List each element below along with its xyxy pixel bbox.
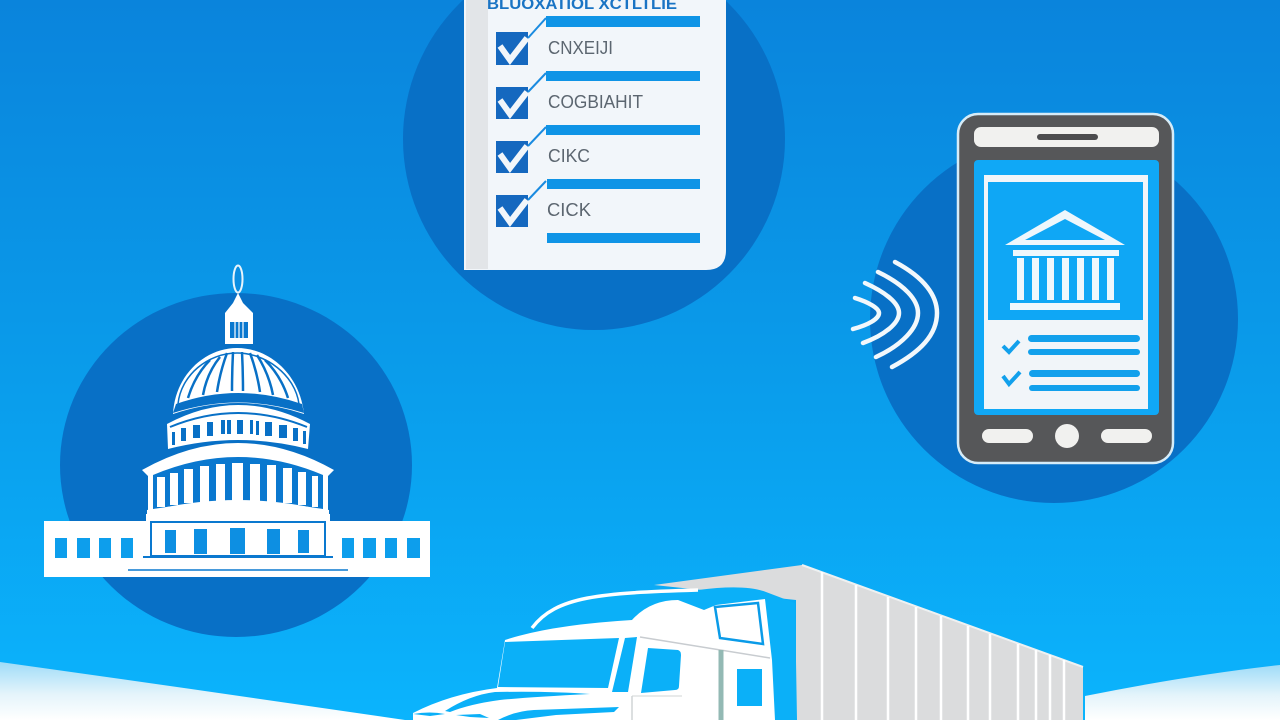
ground hills (0, 662, 1280, 720)
capitol finial (234, 266, 242, 292)
checkbox 1 (496, 18, 546, 65)
checkbox 4 (496, 181, 546, 227)
panel: phone (853, 114, 1238, 503)
icon: bank building (1005, 210, 1125, 310)
truck windshield (498, 638, 619, 688)
capitol backdrop circle (60, 293, 412, 637)
phone backdrop circle (870, 135, 1238, 503)
truck hood (413, 692, 619, 720)
checklist backdrop circle (403, 0, 785, 330)
capitol steps (120, 557, 352, 578)
checklist labels: CICK (547, 200, 591, 220)
trailer ribs (822, 572, 1064, 720)
truck corner window (612, 637, 637, 692)
phone screen (974, 160, 1159, 415)
icon: signal waves (853, 262, 937, 367)
screen list (1003, 335, 1140, 391)
truck roof fairing (532, 587, 797, 720)
checklist labels (547, 38, 643, 220)
checklist labels: CIKC (548, 146, 590, 166)
truck cab (413, 599, 775, 720)
panel: truck (413, 565, 1083, 720)
panel: capitol (44, 266, 430, 637)
capitol center block (146, 514, 330, 564)
truck sleeper window (715, 603, 763, 644)
phone body (958, 114, 1173, 463)
checklist labels: COGBIAHIT (548, 92, 643, 112)
phone top bar (974, 127, 1159, 147)
capitol drum (167, 405, 310, 449)
phone buttons (982, 424, 1152, 448)
capitol lantern (225, 293, 253, 344)
checklist bars (546, 16, 700, 243)
truck side window (737, 669, 762, 706)
capitol colonnade (142, 443, 334, 520)
checklist paper (464, 0, 726, 270)
truck door window (641, 648, 681, 693)
screen card (984, 175, 1148, 409)
capitol wings (44, 521, 430, 577)
paper side strip (466, 0, 488, 269)
panel: checklist (403, 0, 785, 330)
checkbox 2 (496, 73, 546, 119)
truck cab seams (632, 637, 770, 720)
checklist labels: CNXEIJI (548, 38, 613, 58)
checkbox 3 (496, 127, 546, 173)
capitol dome (173, 348, 304, 414)
truck trailer (654, 565, 1083, 720)
